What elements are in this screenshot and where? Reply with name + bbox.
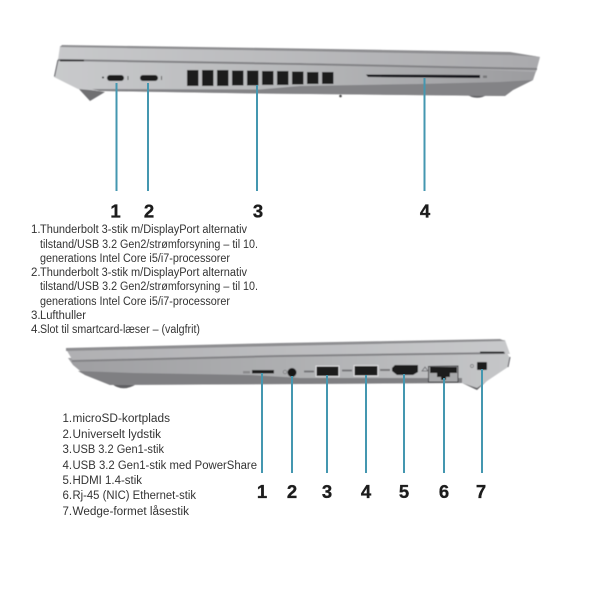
callout numbers: top — [110, 200, 431, 222]
legend: left side ports: 2. — [31, 267, 41, 279]
legend: right side ports: 1. — [62, 413, 72, 425]
rubber foot left — [78, 88, 105, 101]
legend: left side ports — [31, 224, 258, 336]
audio jack — [288, 368, 296, 377]
USB port 2 — [354, 365, 378, 376]
legend: right side ports: 4. — [62, 460, 72, 472]
legend: right side ports — [62, 413, 257, 518]
callout numbers: bottom: 5 — [399, 481, 409, 502]
dark underside — [78, 371, 462, 385]
chassis — [68, 350, 510, 388]
callout numbers: bottom: 6 — [439, 481, 449, 502]
rubber foot — [112, 384, 135, 388]
callout numbers: bottom — [257, 481, 486, 502]
legend: right side ports: 5. — [62, 475, 72, 487]
chassis lower band — [92, 80, 533, 96]
legend: right side ports: USB 3.2 Gen1-stik — [72, 444, 164, 456]
lock slot — [477, 362, 487, 370]
callout numbers: bottom: 2 — [287, 481, 297, 502]
smartcard slot — [366, 74, 480, 78]
callout numbers: top: 2 — [144, 200, 154, 222]
legend: right side ports: 7. — [62, 506, 72, 518]
legend: left side ports: Lufthuller — [40, 310, 86, 322]
port glyphs — [102, 76, 104, 78]
RJ45 port — [428, 366, 458, 382]
HDMI port — [392, 365, 418, 375]
legend: left side ports: 3. — [31, 310, 41, 322]
seam — [72, 352, 505, 362]
small hinge dot — [339, 95, 342, 97]
right edge — [508, 357, 510, 367]
rear foot wedge — [460, 378, 490, 390]
seam — [58, 59, 537, 70]
legend: left side ports: generations Intel Core i5/i7-processorer — [40, 296, 230, 308]
callout lines: bottom — [262, 369, 482, 473]
laptop: left side view — [54, 45, 540, 101]
seam dark tip — [480, 352, 504, 354]
RJ45 glyph — [422, 367, 428, 371]
left edge — [54, 60, 58, 76]
legend: left side ports: generations Intel Core i5/i7-processorer — [40, 253, 230, 265]
lid — [58, 46, 540, 72]
legend: right side ports: 3. — [62, 444, 72, 456]
callout numbers: top: 1 — [110, 200, 121, 222]
lid top edge — [66, 339, 505, 351]
chassis — [54, 60, 537, 96]
callout numbers: bottom: 3 — [322, 481, 332, 502]
USB-C port 1 — [107, 75, 124, 81]
laptop: right side view — [66, 339, 510, 390]
legend: right side ports: 2. — [62, 429, 72, 441]
legend: left side ports: Thunderbolt 3-stik m/DisplayPort alternativ — [40, 224, 247, 236]
callout numbers: bottom: 4 — [361, 481, 372, 502]
seam dark tip — [60, 60, 84, 62]
lid — [66, 340, 510, 361]
legend: right side ports: Universelt lydstik — [72, 429, 161, 441]
callout lines: top — [116, 78, 424, 191]
callout numbers: bottom: 1 — [257, 481, 267, 502]
callout numbers: top: 3 — [253, 200, 263, 222]
legend: right side ports: HDMI 1.4-stik — [72, 475, 142, 487]
callout numbers: bottom: 7 — [476, 481, 486, 502]
callout numbers: top: 4 — [420, 200, 431, 222]
USB-C port 2 — [140, 75, 158, 81]
USB port 1 — [316, 366, 340, 377]
legend: right side ports: microSD-kortplads — [72, 413, 170, 425]
legend: right side ports: 6. — [62, 490, 72, 502]
lid top edge — [60, 45, 540, 57]
legend: left side ports: 4. — [31, 324, 41, 336]
legend: left side ports: Slot til smartcard-læser – (valgfrit) — [40, 324, 200, 336]
air vents — [187, 70, 334, 86]
legend: right side ports: USB 3.2 Gen1-stik med PowerShare — [72, 460, 257, 472]
legend: right side ports: Wedge-formet låsestik — [72, 506, 189, 518]
legend: left side ports: 1. — [31, 224, 41, 236]
rubber foot right — [466, 94, 487, 98]
legend: left side ports: tilstand/USB 3.2 Gen2/strømforsyning – til 10. — [40, 239, 258, 251]
microSD slot — [252, 370, 274, 374]
legend: left side ports: Thunderbolt 3-stik m/DisplayPort alternativ — [40, 267, 247, 279]
legend: right side ports: Rj-45 (NIC) Ethernet-stik — [72, 490, 196, 502]
legend: left side ports: tilstand/USB 3.2 Gen2/strømforsyning – til 10. — [40, 281, 258, 293]
